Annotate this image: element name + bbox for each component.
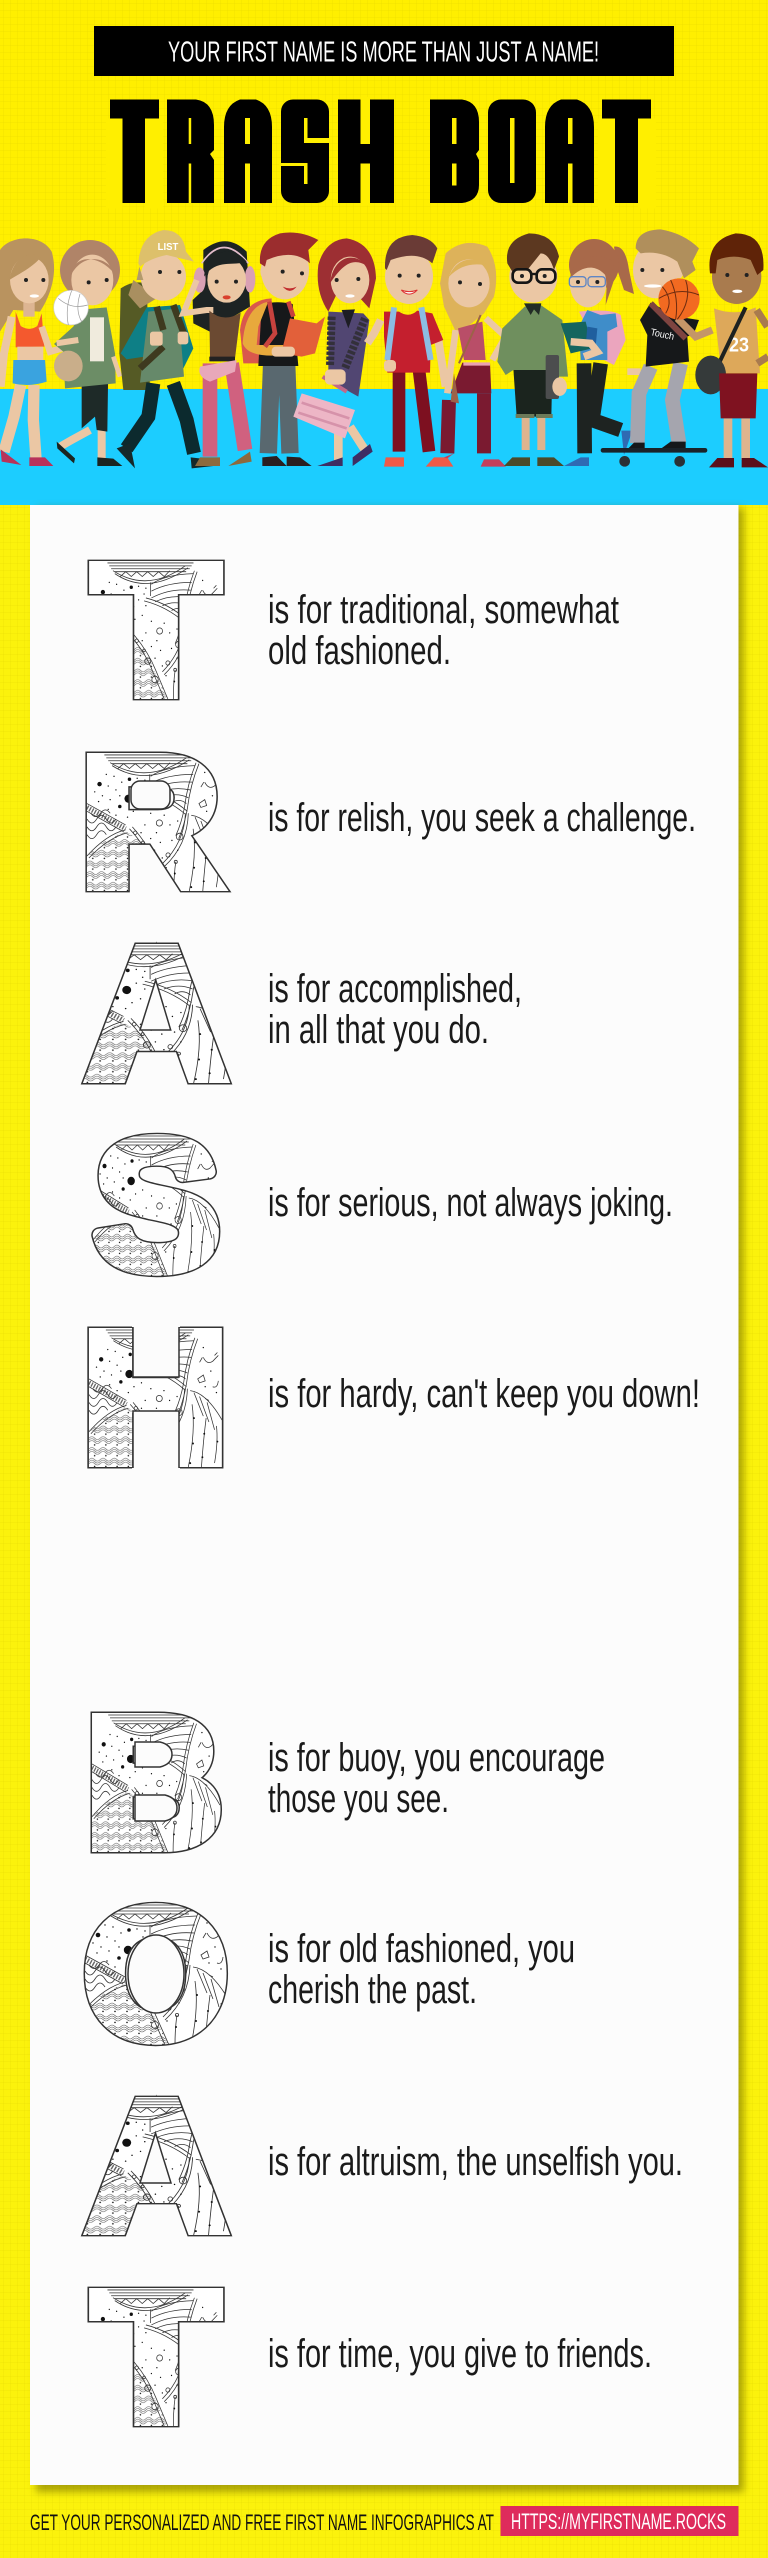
letter B <box>90 1712 222 1854</box>
title: A <box>552 85 586 218</box>
title: A <box>231 85 265 218</box>
title: T <box>120 84 154 218</box>
illustration: twelve students (right half) <box>367 229 768 467</box>
title: S <box>286 85 325 217</box>
person 5: boy with red hair and book <box>240 232 325 466</box>
title: R <box>171 84 211 218</box>
person 8: blonde girl in maroon <box>440 243 506 467</box>
person 2: girl in green jacket with volleyball <box>54 240 122 466</box>
person 6: girl with red bob and pink case <box>293 238 376 466</box>
text: T meaning: is for traditional, somewhat <box>268 588 619 632</box>
letter T (second) <box>88 2286 225 2428</box>
person 11: skateboarder with basketball <box>601 229 712 467</box>
text: A meaning: in all that you do. <box>268 1008 489 1052</box>
letter R <box>85 752 232 892</box>
person 9: boy with black glasses and green sweater <box>497 233 568 466</box>
title: T <box>612 84 646 218</box>
letter H <box>86 1326 224 2416</box>
text: B meaning: those you see. <box>268 1777 449 1821</box>
floor band <box>0 389 768 505</box>
letter H: H <box>82 1294 228 1500</box>
text: O meaning <box>268 1927 575 2012</box>
letter S <box>91 1132 220 1278</box>
title: O <box>491 86 531 218</box>
title <box>120 83 646 218</box>
person 1: girl in orange top <box>0 238 77 466</box>
title block shapes <box>110 100 651 203</box>
text: A meaning: is for accomplished, <box>268 967 522 1011</box>
letter O: O <box>84 1872 228 2075</box>
person 12: boy in basketball jersey <box>695 233 768 467</box>
panel shadow <box>36 508 744 2492</box>
panel: letters and meanings <box>30 505 738 2485</box>
letter S: S <box>94 1104 220 1307</box>
person 10: girl with ponytail and tablet <box>561 239 634 466</box>
footer call to action: GET YOUR PERSONALIZED AND FREE FIRST NAME INFOGRAPHICS AT <box>30 2510 494 2535</box>
person 11: skateboarder with basketball: Touch <box>649 327 675 343</box>
person 7: boy in red T-shirt <box>367 235 453 467</box>
letter A <box>80 942 232 1084</box>
letter T <box>86 560 230 2416</box>
letter A (second): A <box>88 2064 226 2268</box>
text: T meaning <box>268 588 619 673</box>
person 3: backpacker with yellow cap <box>117 230 213 468</box>
illustration: twelve students (left half) <box>0 230 376 468</box>
text: B meaning: is for buoy, you encourage <box>268 1736 605 1780</box>
letter T (second): T <box>94 2255 218 2458</box>
letter T: T <box>94 528 218 731</box>
text: A meaning <box>268 967 522 1052</box>
letter B: B <box>86 1680 222 1885</box>
person 12: boy in basketball jersey: 23 <box>729 334 749 357</box>
title: H <box>341 83 393 217</box>
text: O meaning: cherish the past. <box>268 1968 477 2012</box>
tagline banner <box>94 26 674 76</box>
title: B <box>433 84 475 217</box>
letter A (second) <box>80 2094 232 2236</box>
person 4: girl with headphones and pink trousers <box>183 241 255 466</box>
text: O meaning: is for old fashioned, you <box>268 1927 575 1971</box>
person 3: backpacker with yellow cap: LIST <box>158 242 178 253</box>
text: B meaning <box>268 1736 605 1821</box>
letter R: R <box>81 720 220 923</box>
letter A: A <box>88 910 226 1116</box>
text: T meaning: old fashioned. <box>268 629 451 673</box>
title letter counters <box>106 97 656 208</box>
